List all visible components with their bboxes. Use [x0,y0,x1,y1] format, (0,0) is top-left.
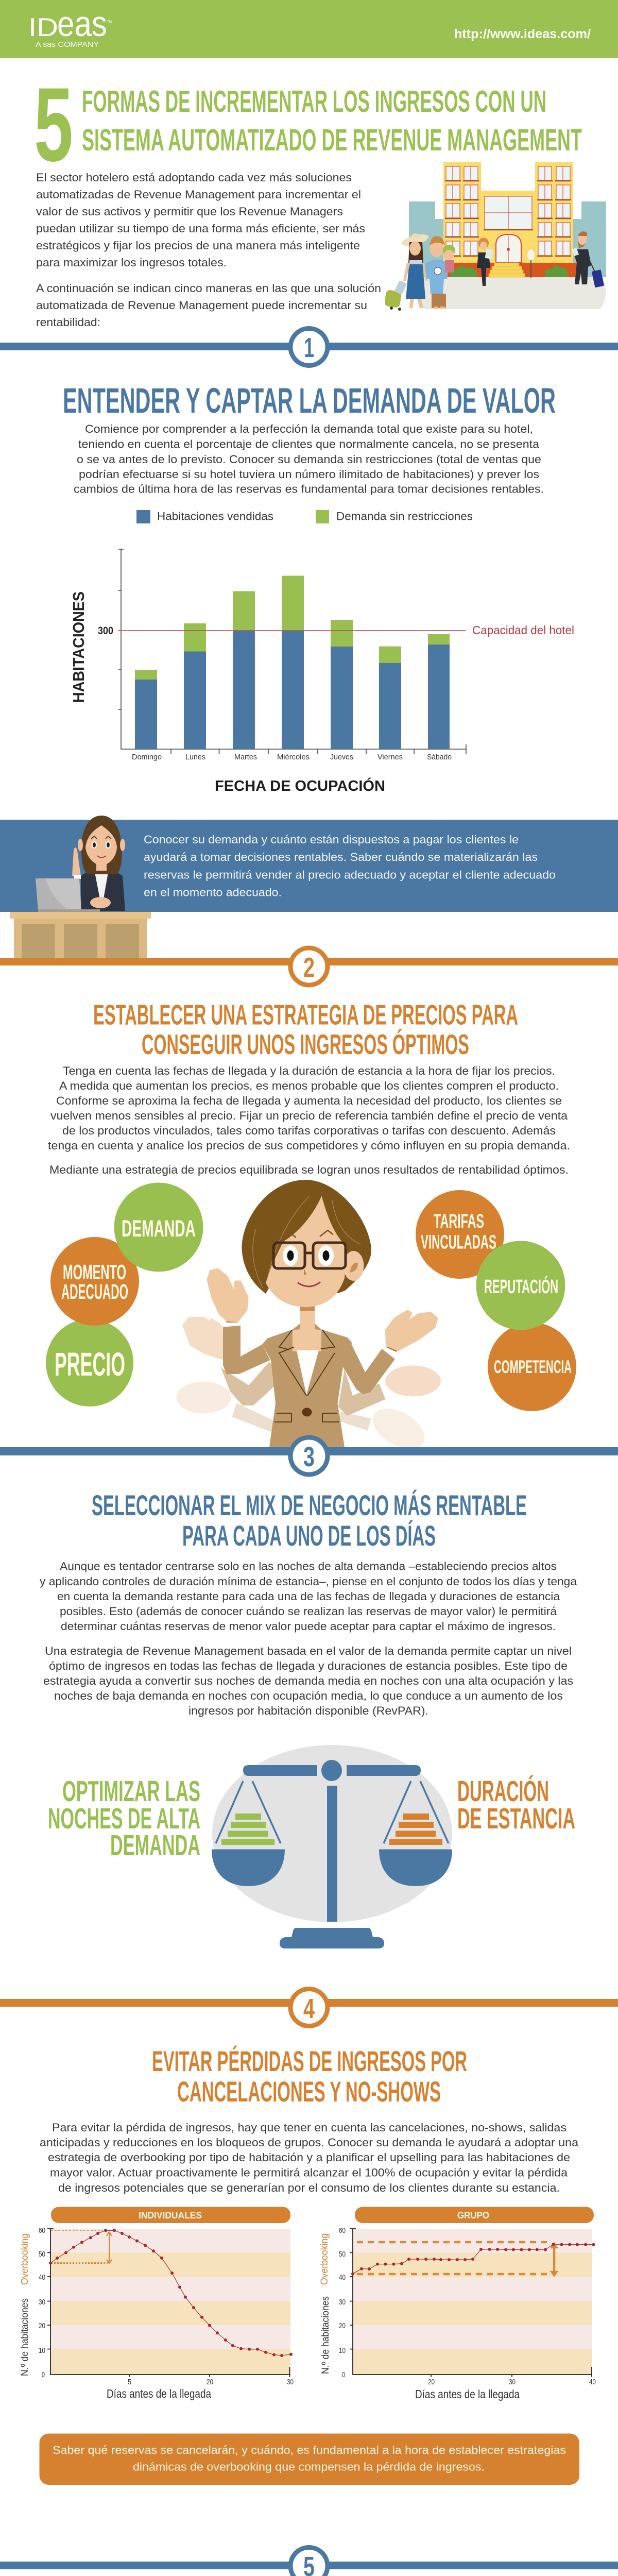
axis labels: 20 [207,2378,213,2386]
axis labels: 60 [339,2226,346,2235]
bar chart: room demand by day: Martes [234,753,257,761]
body text 4: estrategia de overbooking por tipo de habitación y a planificar el upselling para las habitaciones de [48,2151,570,2164]
body text 3: en cuenta la demanda restante para cada una de las fechas de llegada y duraciones de estancia [57,1590,560,1603]
label: optimizar noches de alta demanda: OPTIMIZAR LAS [62,1775,200,1808]
orange stack [389,1814,442,1845]
body text 4: mayor valor. Actuar proactivamente le permitirá alcanzar el 100% de ocupación y evitar la pérdida [50,2166,568,2179]
title [34,66,582,183]
heading 4 [152,2045,467,2108]
woman tourist [401,232,430,308]
intro text: A continuación se indican cinco maneras en las que una solución [36,282,381,295]
label: tarifas vinculadas: VINCULADAS [421,1231,496,1253]
title: 5 [34,66,73,183]
header band [0,0,618,58]
raised arms [223,1326,270,1374]
section divider 1 [0,329,618,366]
heading 3 [92,1489,527,1552]
axis labels: 30 [287,2378,294,2386]
bushes [450,265,477,277]
section divider 4: 4 [303,1993,315,2024]
body text 1: Comience por comprender a la perfección la demanda total que existe para su hotel, [85,422,533,435]
body text 1 [74,422,544,496]
body text 2: Conforme se aproxima la fecha de llegada y aumenta la necesidad del producto, los clientes se [56,1094,562,1107]
chart: grupo: Días antes de la llegada [415,2387,520,2401]
body text 3: y aplicando controles de duración mínima de estancia–, piense en el conjunto de todos los días y tenga [40,1575,577,1588]
body text 4: Para evitar la pérdida de ingresos, hay que tener en cuenta las cancelaciones, no-shows, salidas [52,2121,566,2134]
curve [50,2230,291,2355]
callout box 4: dinámicas de overbooking que compensen la pérdida de ingresos. [133,2461,485,2473]
left pan [212,1850,285,1886]
bar chart: room demand by day: Lunes [185,753,205,761]
axis labels: 30 [39,2298,45,2307]
body text 2: de los productos vinculados, tales como tarifas corporativas o tarifas con descuento. Además [62,1124,556,1137]
body text 3 [40,1560,577,1717]
body text 3: ingresos por habitación disponible (RevPAR). [188,1704,428,1717]
ghost arms and hands [176,1318,441,1457]
heading 2 [93,998,518,1060]
heading 3: PARA CADA UNO DE LOS DÍAS [182,1519,436,1552]
axis labels: 50 [339,2250,346,2259]
section divider 4 [0,1989,618,2026]
chart: individuales [20,2207,294,2400]
overbooking markers [357,2242,552,2274]
callout band 1: ayudará a tomar decisiones rentables. Saber cuándo se materializarán las [144,851,538,863]
green suitcase [384,290,402,308]
axis labels: 10 [39,2346,45,2355]
pill header: INDIVIDUALES [139,2210,202,2221]
intro text: para maximizar los ingresos totales. [36,256,227,269]
businessman with blue suitcase [572,231,604,287]
bubble: competencia [488,1323,576,1411]
axis labels: 60 [39,2226,45,2235]
bar chart: room demand by day: Viernes [377,753,403,761]
axis labels [39,2226,294,2386]
section divider 5 [0,2547,618,2576]
chart legend: Demanda sin restricciones [336,510,473,522]
body text 3: noches de baja demanda en noches con ocupación media, lo que conduce a un aumento de los [54,1689,563,1702]
label: optimizar noches de alta demanda: DEMANDA [110,1829,200,1862]
axis labels [339,2226,596,2386]
label: duracion de estancia [457,1775,575,1835]
lamp [527,249,535,261]
ear [343,1251,364,1281]
axis labels: 40 [339,2273,346,2282]
overbooking markers [51,2230,102,2231]
body text 2 [48,1064,570,1176]
section divider 2 [0,948,618,985]
day labels: Domingo [132,753,162,761]
intro text [36,171,381,329]
intro text: automatizada de Revenue Management puede incrementar su [36,299,367,312]
illustration: hotel with guests [384,162,606,311]
intro text: puedan utilizar su tiempo de una forma más eficiente, ser más [36,222,365,235]
axis labels: 50 [39,2250,45,2259]
axis labels: 0 [342,2370,345,2379]
bar chart: room demand by day [70,549,574,794]
chart: grupo: N.º de habitaciones [320,2296,331,2374]
intro text: automatizadas de Revenue Management para incrementar el [36,188,361,201]
callout box 4: Saber qué reservas se cancelarán, y cuándo, es fundamental a la hora de establecer estrategias [53,2444,566,2456]
body text 3: estrategia ayuda a convertir sus noches de demanda media en noches con una alta ocupación y las [43,1674,573,1687]
body text 3: óptimo de ingresos en todas las fechas de llegada y duraciones de estancia posibles. Este tipo de [49,1659,568,1672]
chart: grupo [319,2207,596,2401]
right pan [379,1850,452,1886]
bar chart: room demand by day: Miércoles [277,753,310,761]
axis labels: 40 [589,2378,596,2386]
intro text: valor de sus activos y permitir que los Revenue Managers [36,205,343,218]
bar chart: room demand by day: 300 [98,625,113,637]
section divider 3: 3 [303,1442,315,1472]
body text 3: Aunque es tentador centrarse solo en las noches de alta demanda –estableciendo precios altos [60,1560,557,1572]
bubble: reputacion [476,1241,565,1330]
body text 1: cambios de última hora de las reservas es fundamental para tomar decisiones rentables. [74,482,544,496]
body text 2: Mediante una estrategia de precios equilibrada se logran unos resultados de rentabilidad óptimos. [49,1163,569,1176]
website url: http://www.ideas.com/ [454,27,591,41]
callout box 4 [39,2434,579,2485]
body text 1: podrían efectuarse si su hotel tuviera un número ilimitado de habitaciones) y prever los [79,468,539,481]
jacket [262,1324,352,1447]
chart legend [136,510,473,523]
section divider 2: 2 [303,952,315,983]
door and stairs [496,234,521,263]
illustration: woman at desk with laptop [10,816,151,958]
man tourist with child [425,236,455,309]
body text 2: Tenga en cuenta las fechas de llegada y la duración de estancia a la hora de fijar los precios. [63,1064,555,1077]
logo: IDeaS: ID [28,13,58,42]
curve [353,2244,593,2274]
body text 3: posibles. Esto (además de conocer cuándo se realizan las reservas de mayor valor) le permitirá [60,1605,557,1618]
neck and shirt [293,1303,321,1351]
bubble: momento adecuado: ADECUADO [61,1280,128,1303]
face [266,1196,347,1307]
desk [14,919,147,958]
bubble: precio: PRECIO [55,1346,125,1383]
body text 4: anticipadas y reducciones en los bloqueos de grupos. Conocer su demanda le ayudará a adoptar una [40,2136,579,2149]
axis labels: 30 [509,2378,516,2386]
axis labels: 10 [339,2346,346,2355]
body text 3: determinar cuántas reservas de menor valor puede aceptar para captar el máximo de ingresos. [61,1620,556,1633]
hands [208,1269,247,1321]
logo: IDeaS [28,4,112,49]
bubble: momento adecuado [50,1237,139,1326]
body text 2: A medida que aumentan los precios, es menos probable que los clientes compren el producto. [59,1079,559,1092]
logo: IDeaS: eas [57,4,107,44]
axis labels: 20 [339,2321,346,2330]
chart: grupo: Overbooking [319,2233,330,2285]
bar chart: room demand by day: Jueves [330,753,353,761]
body text 1: teniendo en cuenta el porcentaje de clientes que normalmente cancela, no se presenta [78,438,540,450]
section divider 3 [0,1437,618,1475]
window sills [445,181,571,256]
body text 2: tenga en cuenta y analice los precios de sus competidores y cómo influyen en su propia demanda. [48,1139,570,1152]
pill header [51,2207,290,2223]
receptionist [477,238,493,286]
intro text: El sector hotelero está adoptando cada vez más soluciones [36,171,352,184]
bubble: demanda [114,1183,203,1272]
callout band 1: en el momento adecuado. [144,886,282,899]
bar chart: room demand by day: Sábado [427,753,452,761]
callout band 1: reservas le permitirá vender al precio adecuado y aceptar el cliente adecuado [144,869,556,881]
green stack [221,1814,274,1845]
axis labels: 20 [428,2378,435,2386]
label: optimizar noches de alta demanda [48,1775,200,1862]
body text 2: vuelven menos sensibles al precio. Fijar un precio de referencia también define el precio de venta [50,1109,568,1122]
intro text: estratégicos y fijar los precios de una manera más inteligente [36,239,360,252]
glasses [273,1243,305,1268]
label: optimizar noches de alta demanda: NOCHES DE ALTA [48,1802,200,1835]
bubble: momento adecuado: MOMENTO [63,1260,126,1284]
body text 1: o se va antes de lo previsto. Conocer su demanda sin restricciones (total de ventas que [77,453,541,466]
windows [446,166,570,256]
label: duracion de estancia: DURACIÓN [457,1775,549,1808]
label: tarifas vinculadas [421,1211,496,1253]
logo: IDeaS: A sas COMPANY [36,40,99,49]
bubble: demanda: DEMANDA [122,1215,196,1242]
pill header: GRUPO [457,2210,489,2221]
body text 4: de ingresos potenciales que se generarían por el consumo de los clientes durante su estancia. [58,2181,560,2194]
body text 4 [40,2121,579,2194]
illustration: multi-armed businesswoman [176,1180,441,1457]
chart: individuales: N.º de habitaciones [20,2298,30,2376]
callout band 1 [0,820,618,912]
chart legend: Habitaciones vendidas [157,510,273,522]
chart: individuales: Días antes de la llegada [107,2387,211,2400]
chart: individuales: Overbooking [20,2233,30,2285]
illustration: balance scale [212,1745,452,1948]
intro text: rentabilidad: [36,316,100,329]
bubble: precio [46,1319,133,1406]
axis labels: 40 [39,2273,45,2282]
body text 3: Una estrategia de Revenue Management basada en el valor de la demanda permite captar un nivel [45,1645,572,1657]
cuffs [227,1319,398,1352]
axis labels: 5 [128,2378,131,2386]
callout band 1: Conocer su demanda y cuánto están dispuestos a pagar los clientes le [144,833,519,846]
bubble: tarifas vinculadas [416,1190,504,1279]
pill header [355,2207,594,2223]
hair [242,1180,371,1294]
axis labels: 0 [42,2370,45,2379]
logo: IDeaS: TM [107,20,112,24]
x axis title: FECHA DE OCUPACIÓN [215,777,385,794]
bar chart: room demand by day: Capacidad del hotel [472,623,574,637]
y axis title: HABITACIONES [70,591,88,703]
axis labels: 30 [339,2298,346,2307]
section divider 1: 1 [304,332,314,363]
bubble: reputacion: REPUTACIÓN [484,1275,558,1298]
axis labels: 20 [39,2321,45,2330]
hotel capacity line [118,630,466,631]
heading 4: CANCELACIONES Y NO-SHOWS [177,2075,441,2108]
label: tarifas vinculadas: TARIFAS [434,1211,484,1232]
